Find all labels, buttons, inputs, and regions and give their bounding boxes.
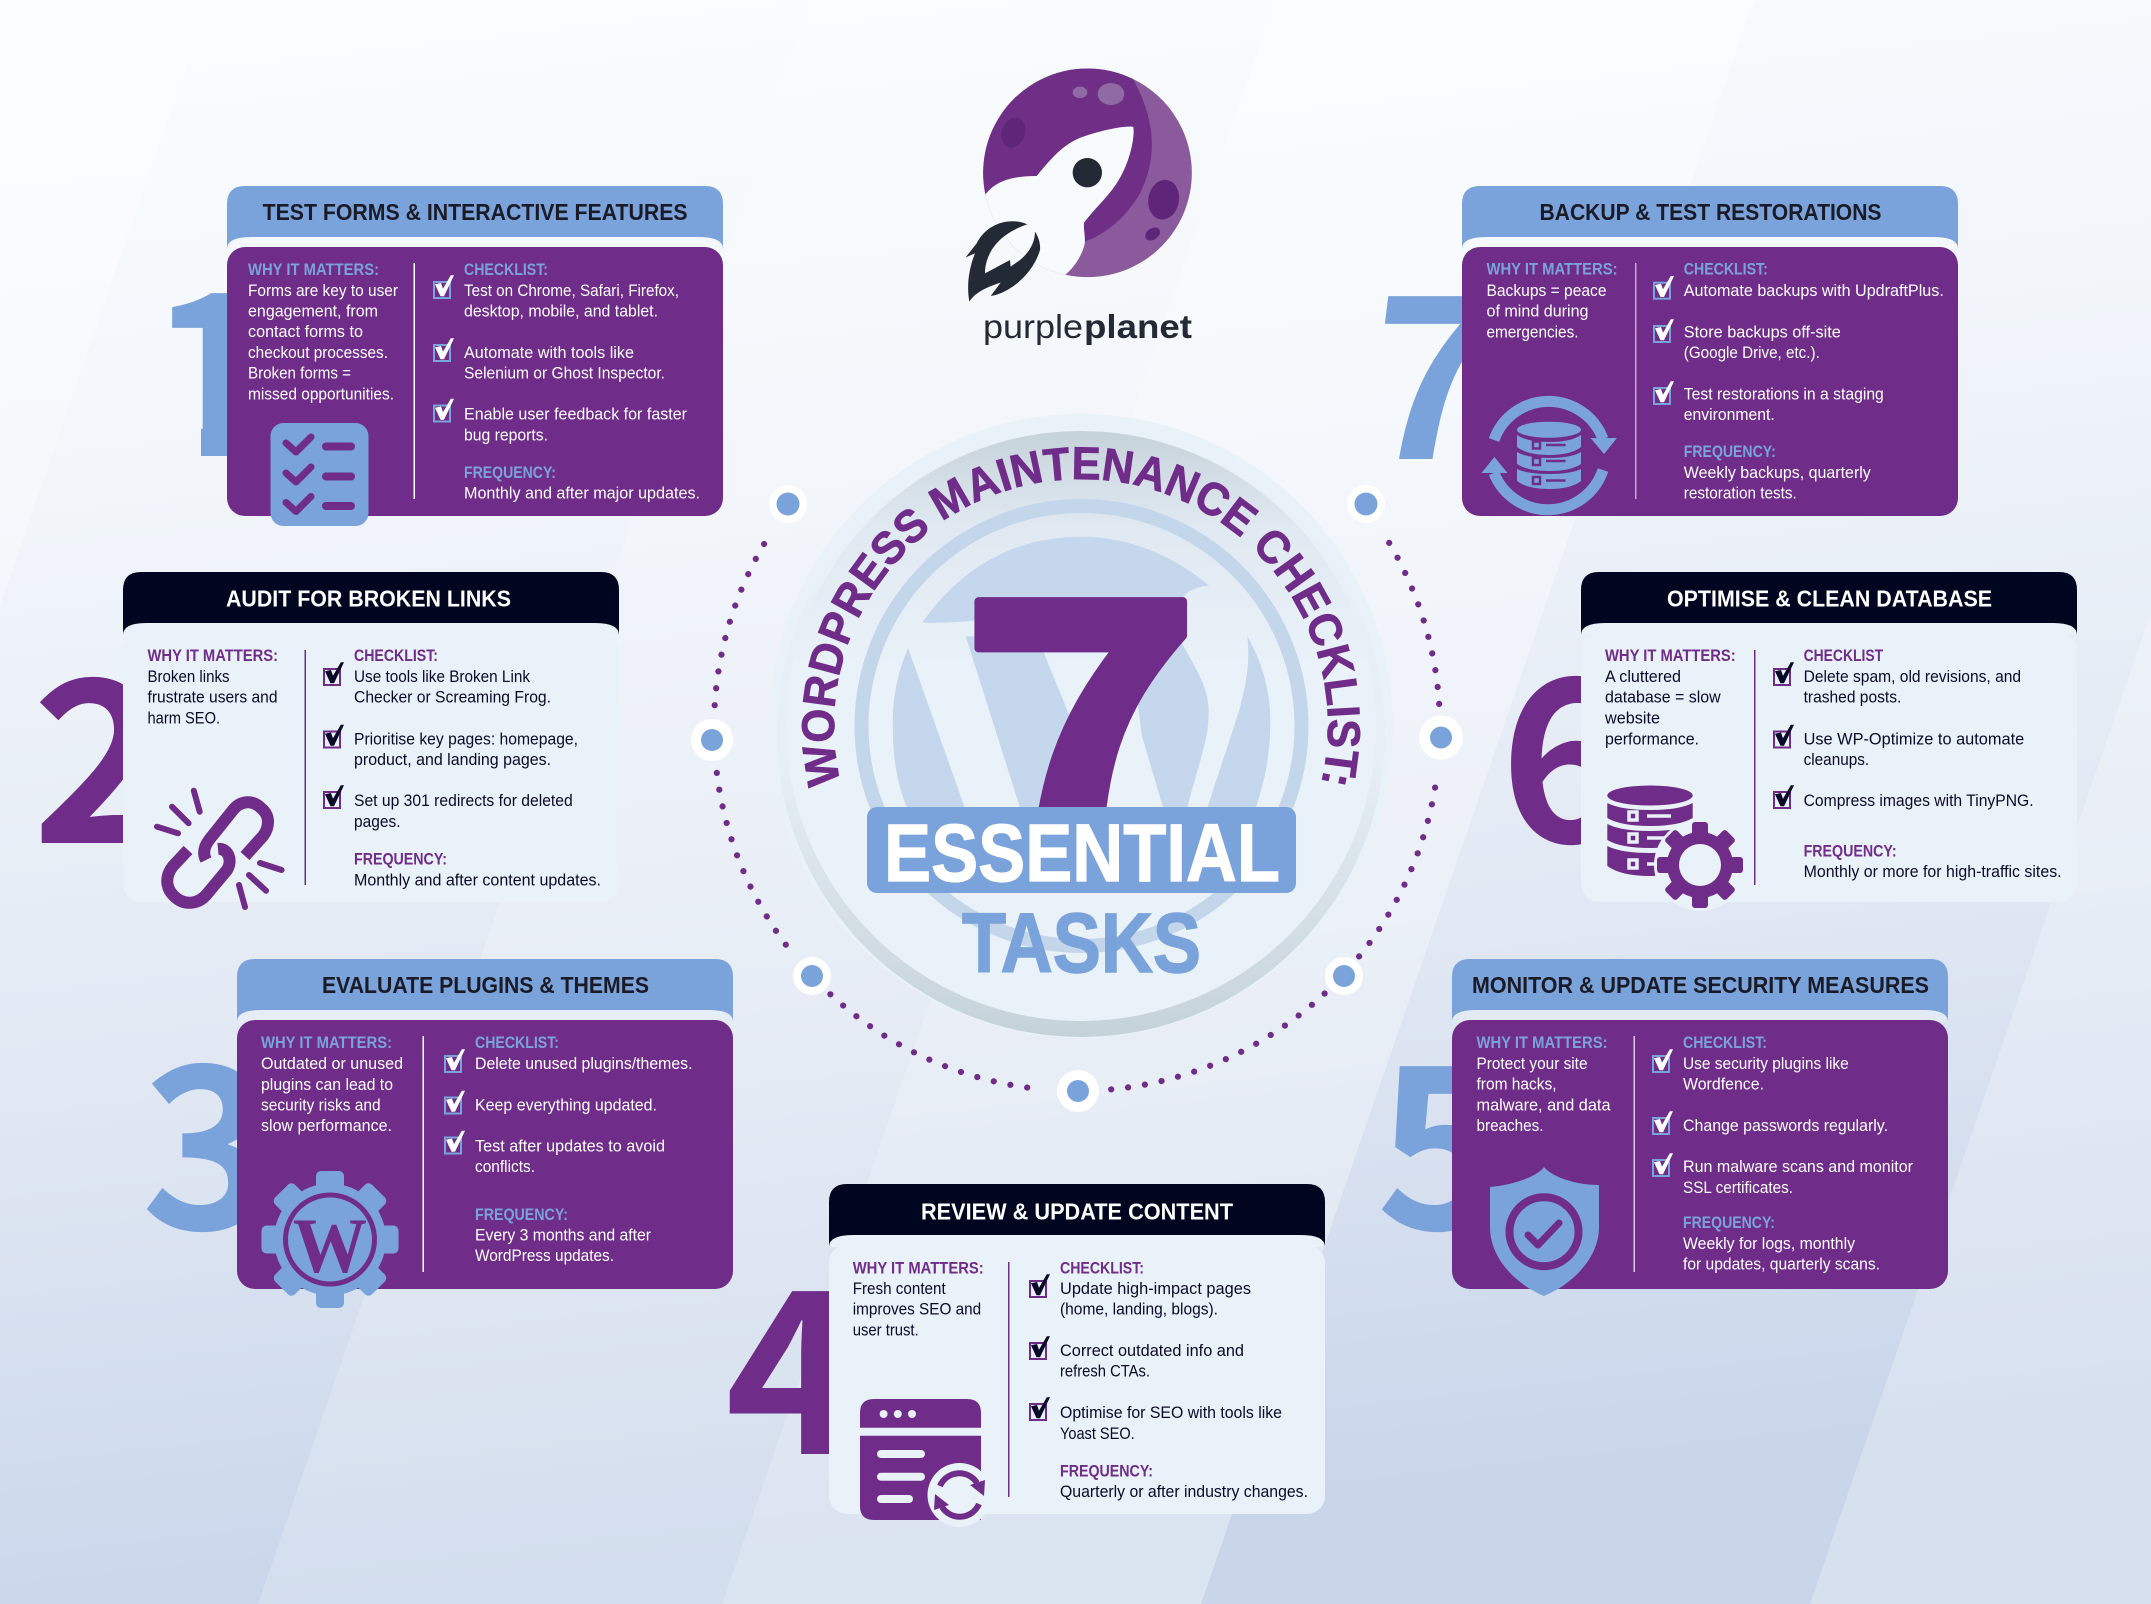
divider xyxy=(1634,1036,1635,1272)
checklist xyxy=(354,647,578,831)
why it matters: database = slow xyxy=(1605,689,1721,707)
checklist xyxy=(1060,1259,1282,1443)
panel 6: database xyxy=(1581,572,2077,911)
why it matters: WHY IT MATTERS: xyxy=(261,1034,392,1052)
checklist: pages. xyxy=(354,813,400,831)
checklist: Automate backups with UpdraftPlus. xyxy=(1684,282,1944,300)
why it matters: Broken forms = xyxy=(248,365,351,383)
panel 7 header: BACKUP & TEST RESTORATIONS xyxy=(1540,199,1882,225)
number 7: 7 xyxy=(1349,198,1522,525)
checklist: CHECKLIST xyxy=(1804,647,1883,665)
frequency: Quarterly or after industry changes. xyxy=(1060,1483,1308,1501)
checklist: bug reports. xyxy=(464,426,548,444)
why it matters: from hacks, xyxy=(1476,1076,1556,1094)
why it matters xyxy=(1604,647,1736,748)
panel 2 header: AUDIT FOR BROKEN LINKS xyxy=(226,586,511,612)
checklist: Update high-impact pages xyxy=(1060,1280,1251,1298)
checklist: Enable user feedback for faster xyxy=(464,406,687,424)
icon: database with gear xyxy=(1607,786,1746,911)
checklist: Keep everything updated. xyxy=(475,1097,657,1115)
panel 3 header: EVALUATE PLUGINS & THEMES xyxy=(322,972,649,998)
panel 4 body xyxy=(829,1245,1325,1514)
frequency xyxy=(1804,842,2062,881)
checklist: CHECKLIST: xyxy=(1684,261,1768,279)
why it matters: breaches. xyxy=(1476,1117,1544,1135)
why it matters: plugins can lead to xyxy=(261,1076,393,1094)
why it matters xyxy=(1486,261,1618,341)
why it matters: website xyxy=(1604,710,1660,728)
frequency xyxy=(1060,1463,1308,1501)
frequency: restoration tests. xyxy=(1684,485,1797,503)
panel 3: plugins and themes xyxy=(237,959,733,1308)
checklist: Change passwords regularly. xyxy=(1683,1117,1888,1135)
frequency: FREQUENCY: xyxy=(1684,443,1776,461)
icon: database backup cycle xyxy=(1481,401,1617,510)
tasks: TASKS xyxy=(962,896,1201,990)
essential box: ESSENTIAL xyxy=(884,808,1280,899)
why it matters: WHY IT MATTERS: xyxy=(1486,261,1618,279)
number 2: 2 xyxy=(32,582,165,909)
checklist xyxy=(1683,1034,1913,1197)
divider xyxy=(422,1036,424,1272)
checkboxes xyxy=(445,1049,465,1154)
panel 1 header: TEST FORMS & INTERACTIVE FEATURES xyxy=(263,199,688,225)
checklist: Compress images with TinyPNG. xyxy=(1804,792,2034,810)
panel 5 header xyxy=(1452,959,1948,1022)
checklist: Correct outdated info and xyxy=(1060,1342,1244,1360)
checklist: CHECKLIST: xyxy=(475,1034,559,1052)
why it matters: WHY IT MATTERS: xyxy=(853,1259,984,1277)
why it matters: improves SEO and xyxy=(853,1301,981,1319)
checklist: Delete unused plugins/themes. xyxy=(475,1055,692,1073)
panel 4: review content xyxy=(829,1184,1325,1527)
checklist: CHECKLIST: xyxy=(464,261,548,279)
why it matters: checkout processes. xyxy=(248,344,388,362)
checklist xyxy=(475,1034,692,1176)
why it matters: WHY IT MATTERS: xyxy=(148,647,278,665)
checklist: Yoast SEO. xyxy=(1060,1425,1135,1443)
why it matters xyxy=(853,1259,984,1339)
checkboxes xyxy=(1774,662,1794,808)
frequency xyxy=(1683,1214,1880,1274)
wordpress logo watermark xyxy=(893,537,1270,813)
panel 6 body xyxy=(1581,633,2077,902)
why it matters xyxy=(248,261,398,403)
checklist: Test on Chrome, Safari, Firefox, xyxy=(464,282,679,300)
panel 7 header xyxy=(1462,186,1958,249)
checklist: desktop, mobile, and tablet. xyxy=(464,302,658,320)
why it matters: Forms are key to user xyxy=(248,282,398,300)
panel 6 header xyxy=(1581,572,2077,635)
why it matters: user trust. xyxy=(853,1321,919,1339)
frequency: WordPress updates. xyxy=(475,1247,614,1265)
checklist: Use WP-Optimize to automate xyxy=(1804,730,2024,748)
panel 2 body xyxy=(123,633,619,902)
curved title: WORDPRESS MAINTENANCE CHECKLIST: xyxy=(802,446,1360,789)
divider xyxy=(1008,1262,1010,1497)
checklist xyxy=(1804,647,2034,810)
checklist: Selenium or Ghost Inspector. xyxy=(464,365,665,383)
panel 2: broken links xyxy=(123,572,619,907)
panel 4 header xyxy=(829,1184,1325,1247)
number 5: 5 xyxy=(1376,968,1509,1295)
checklist: Set up 301 redirects for deleted xyxy=(354,792,573,810)
why it matters: performance. xyxy=(1605,730,1699,748)
why it matters: WHY IT MATTERS: xyxy=(248,261,379,279)
checklist xyxy=(1684,261,1944,424)
checklist: CHECKLIST: xyxy=(1060,1259,1144,1277)
number 1: 1 xyxy=(148,195,281,522)
central emblem xyxy=(782,414,1385,1037)
icon: wordpress gear xyxy=(262,1171,398,1308)
why it matters: WHY IT MATTERS: xyxy=(1476,1034,1608,1052)
checklist: Use security plugins like xyxy=(1683,1055,1849,1073)
why it matters: security risks and xyxy=(261,1097,381,1115)
checklist: product, and landing pages. xyxy=(354,751,551,769)
checklist: environment. xyxy=(1684,406,1775,424)
why it matters: engagement, from xyxy=(248,302,378,320)
why it matters xyxy=(148,647,278,727)
why it matters: A cluttered xyxy=(1605,668,1681,686)
why it matters: emergencies. xyxy=(1486,323,1578,341)
divider xyxy=(1635,263,1636,499)
frequency xyxy=(1684,443,1872,503)
panel 5: security xyxy=(1452,959,1948,1296)
panel 3 body xyxy=(237,1020,733,1289)
logo wordmark: planet xyxy=(1084,308,1192,345)
logo: purple planet xyxy=(966,57,1192,302)
number 3: 3 xyxy=(141,968,274,1295)
checkboxes xyxy=(1653,1049,1673,1176)
icon: shield xyxy=(1490,1167,1599,1296)
panel 2 header xyxy=(123,572,619,635)
checklist: Automate with tools like xyxy=(464,344,634,362)
checklist xyxy=(464,261,687,444)
frequency: for updates, quarterly scans. xyxy=(1683,1256,1880,1274)
panel 4 header: REVIEW & UPDATE CONTENT xyxy=(921,1198,1233,1224)
divider xyxy=(414,263,415,499)
frequency: Weekly for logs, monthly xyxy=(1683,1235,1856,1253)
panel 5 body xyxy=(1452,1020,1948,1289)
why it matters: contact forms to xyxy=(248,323,363,341)
number 6: 6 xyxy=(1500,581,1633,908)
checkboxes xyxy=(1030,1274,1050,1420)
frequency: Monthly and after content updates. xyxy=(354,871,601,889)
checklist: conflicts. xyxy=(475,1158,535,1176)
frequency: FREQUENCY: xyxy=(354,851,447,869)
frequency: FREQUENCY: xyxy=(464,464,556,482)
frequency xyxy=(354,851,601,889)
checklist: Test after updates to avoid xyxy=(475,1138,665,1156)
panel 1 header xyxy=(227,186,723,249)
why it matters: Outdated or unused xyxy=(261,1055,403,1073)
panel 7 body xyxy=(1462,247,1958,516)
why it matters: of mind during xyxy=(1486,303,1588,321)
icon: browser window with refresh xyxy=(860,1399,992,1527)
icon: checklist clipboard xyxy=(270,423,368,526)
frequency: FREQUENCY: xyxy=(1683,1214,1775,1232)
checklist: Checker or Screaming Frog. xyxy=(354,689,551,707)
checklist: Optimise for SEO with tools like xyxy=(1060,1404,1282,1422)
dotted orbit with nodes xyxy=(691,485,1463,1112)
logo wordmark: purple xyxy=(983,308,1083,345)
checklist: Delete spam, old revisions, and xyxy=(1804,668,2021,686)
checklist: Store backups off-site xyxy=(1684,323,1841,341)
checkboxes xyxy=(1654,276,1674,404)
why it matters: malware, and data xyxy=(1476,1097,1611,1115)
why it matters: missed opportunities. xyxy=(248,385,394,403)
divider xyxy=(304,650,306,885)
frequency xyxy=(464,464,700,502)
frequency: FREQUENCY: xyxy=(475,1206,568,1224)
panel 1 body xyxy=(227,247,723,516)
checkboxes xyxy=(324,662,344,808)
checkboxes xyxy=(434,275,454,422)
why it matters: frustrate users and xyxy=(148,689,278,707)
frequency: Monthly and after major updates. xyxy=(464,484,700,502)
why it matters: harm SEO. xyxy=(148,709,220,727)
panel 6 header: OPTIMISE & CLEAN DATABASE xyxy=(1667,586,1992,612)
checklist: Wordfence. xyxy=(1683,1076,1764,1094)
checklist: CHECKLIST: xyxy=(354,647,438,665)
checklist: (home, landing, blogs). xyxy=(1060,1301,1218,1319)
checklist: Run malware scans and monitor xyxy=(1683,1158,1913,1176)
frequency xyxy=(475,1206,651,1265)
checklist: SSL certificates. xyxy=(1683,1179,1793,1197)
panel 1: test forms xyxy=(227,186,723,526)
frequency: FREQUENCY: xyxy=(1060,1463,1153,1481)
why it matters: Broken links xyxy=(148,668,230,686)
panel 7: backup xyxy=(1462,186,1958,516)
frequency: FREQUENCY: xyxy=(1804,842,1897,860)
frequency: Weekly backups, quarterly xyxy=(1684,464,1872,482)
number 4: 4 xyxy=(725,1193,858,1520)
panel 5 header: MONITOR & UPDATE SECURITY MEASURES xyxy=(1472,972,1929,998)
logo wordmark xyxy=(983,308,1192,345)
frequency: Every 3 months and after xyxy=(475,1227,651,1245)
checklist: (Google Drive, etc.). xyxy=(1684,344,1820,362)
why it matters xyxy=(261,1034,403,1135)
why it matters: slow performance. xyxy=(261,1117,392,1135)
panel 3 header xyxy=(237,959,733,1022)
frequency: Monthly or more for high-traffic sites. xyxy=(1804,863,2062,881)
checklist: Use tools like Broken Link xyxy=(354,668,531,686)
why it matters: Fresh content xyxy=(853,1280,946,1298)
why it matters: Protect your site xyxy=(1476,1055,1588,1073)
checklist: cleanups. xyxy=(1804,751,1869,769)
checklist: refresh CTAs. xyxy=(1060,1363,1150,1381)
divider xyxy=(1754,650,1756,885)
big number 7: 7 xyxy=(958,433,1203,989)
checklist: Prioritise key pages: homepage, xyxy=(354,730,578,748)
why it matters: Backups = peace xyxy=(1486,282,1606,300)
why it matters: WHY IT MATTERS: xyxy=(1605,647,1736,665)
icon: wordpress gear: W xyxy=(293,1202,367,1289)
why it matters xyxy=(1476,1034,1611,1135)
checklist: Test restorations in a staging xyxy=(1684,385,1884,403)
checklist: CHECKLIST: xyxy=(1683,1034,1767,1052)
icon: broken link xyxy=(157,791,282,907)
checklist: trashed posts. xyxy=(1804,689,1901,707)
